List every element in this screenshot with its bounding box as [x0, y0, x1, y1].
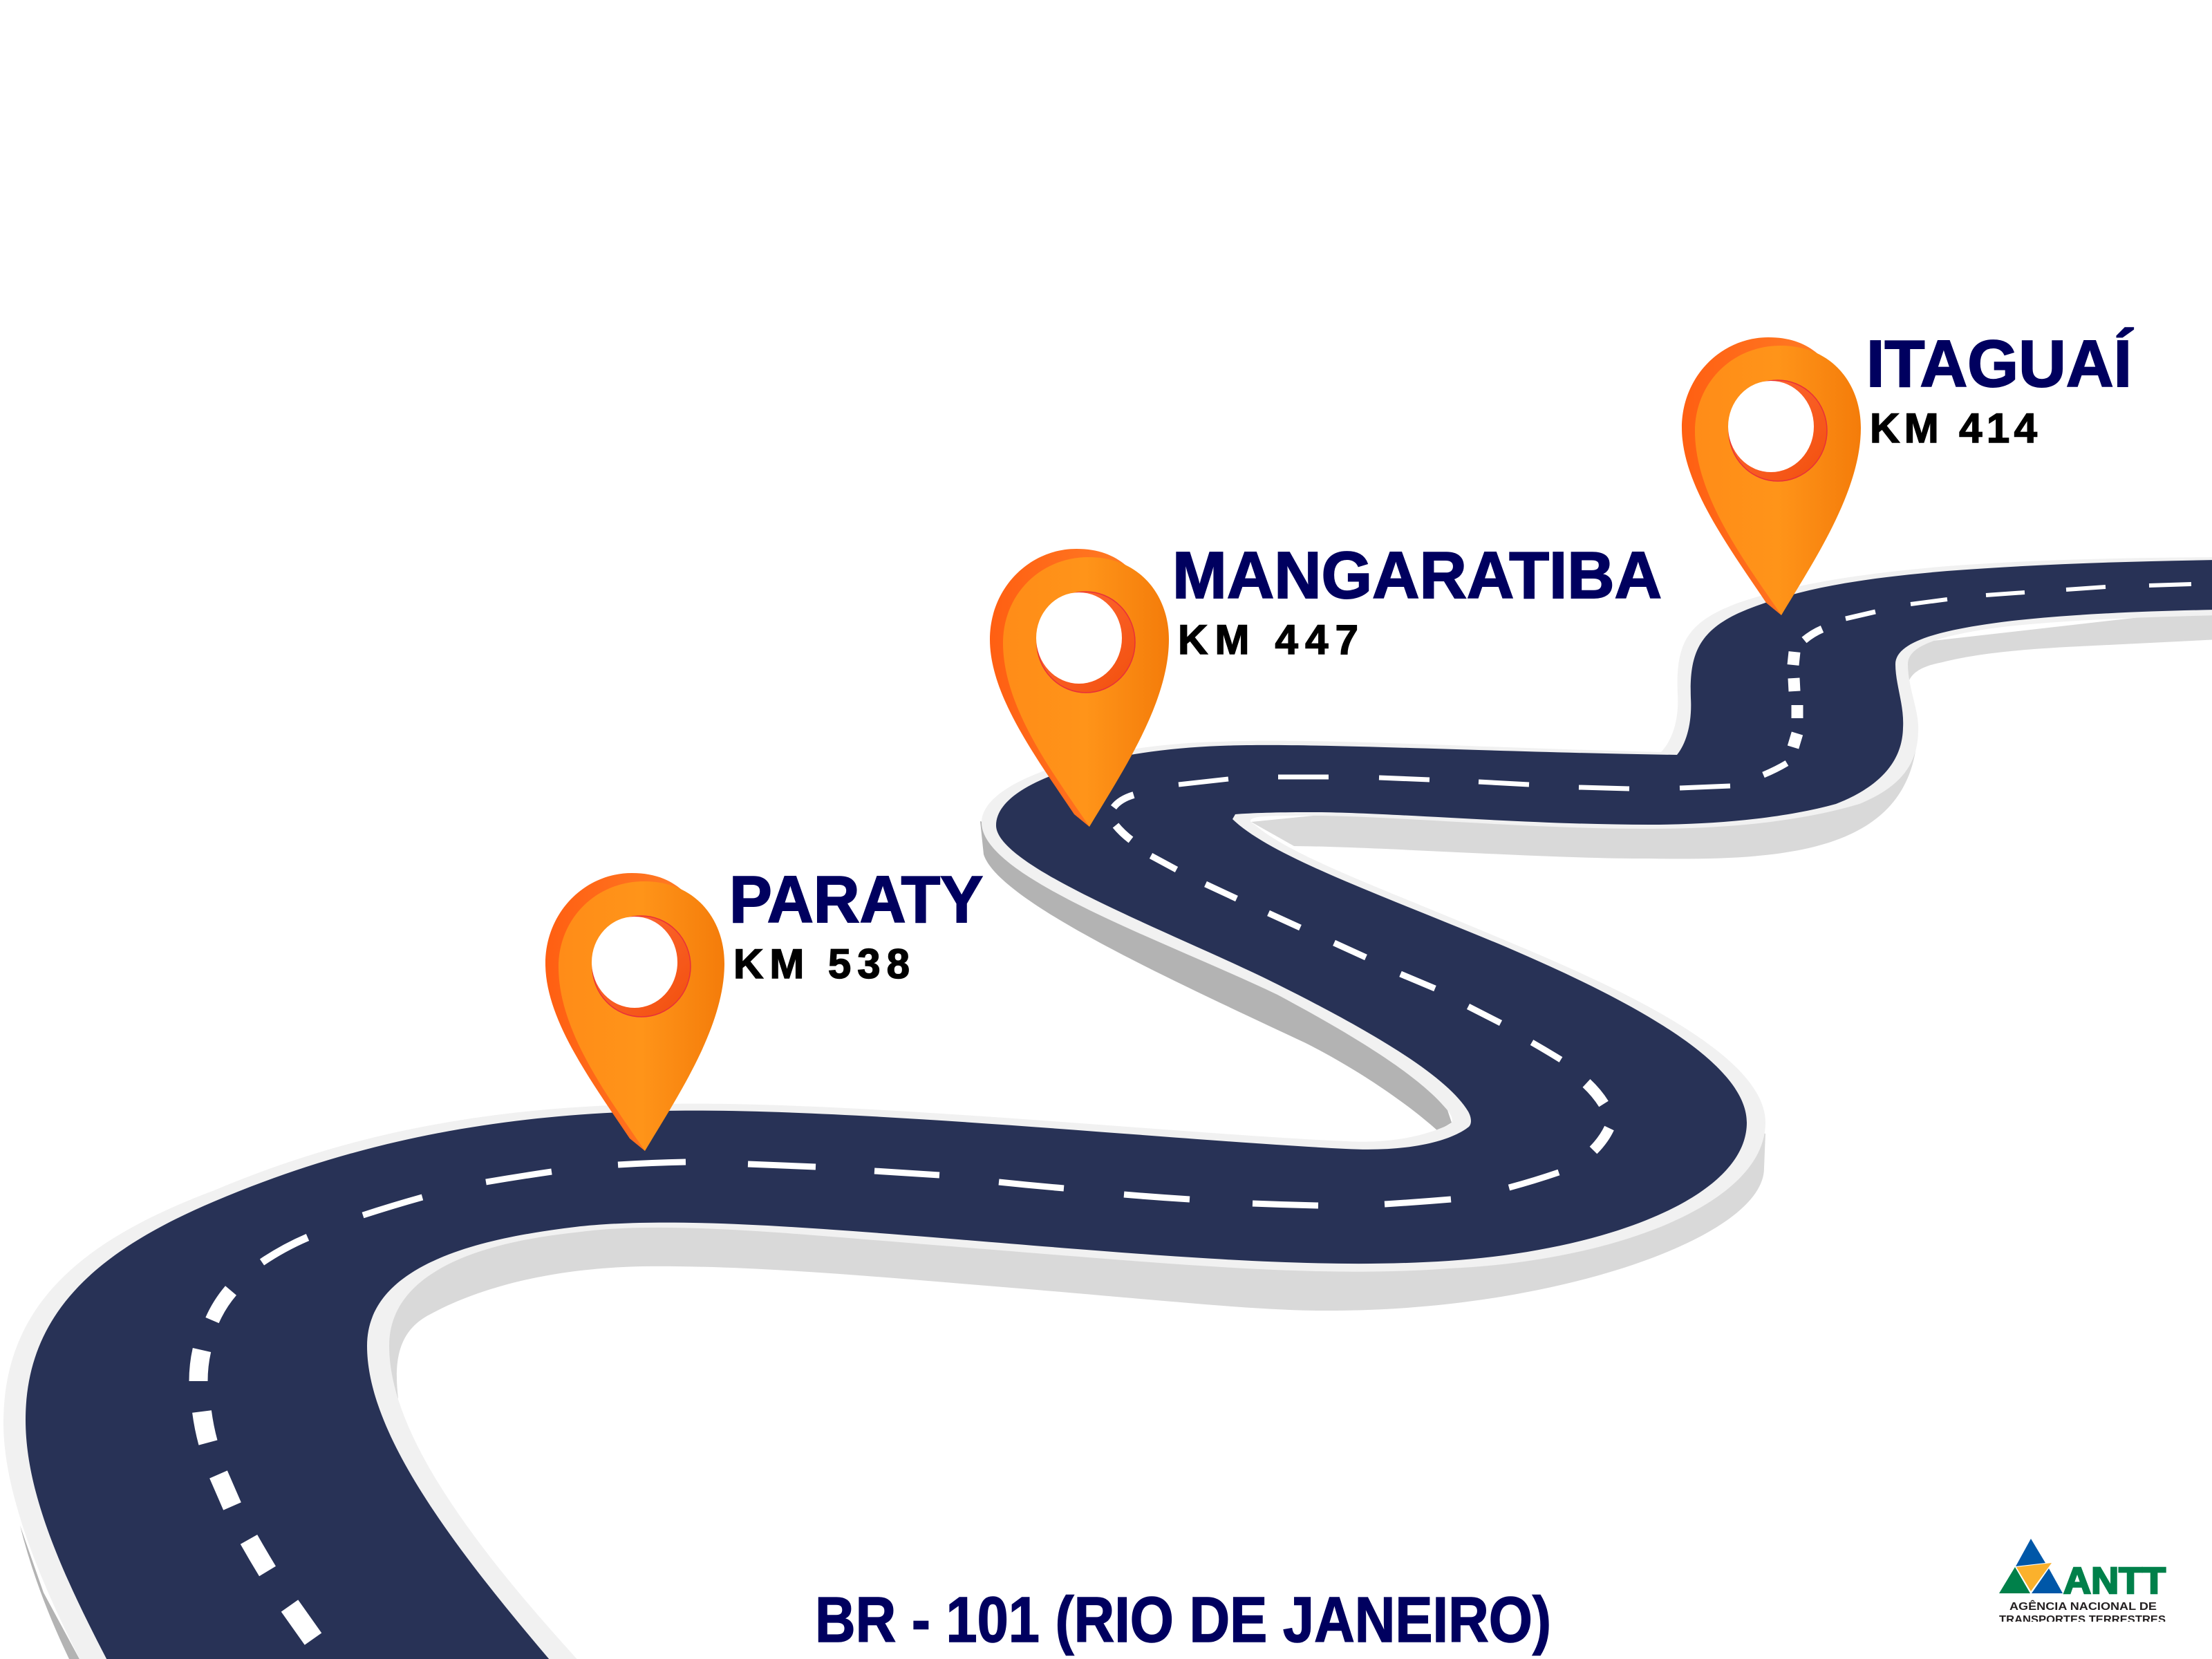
- logo agency name: AGÊNCIA NACIONAL DE: [2009, 1600, 2157, 1613]
- kilometre marker: KM 447: [1178, 617, 1358, 663]
- city name: PARATY: [729, 863, 983, 937]
- label: Paraty: [729, 863, 983, 987]
- footer title: BR - 101 (RIO DE JANEIRO): [815, 1584, 1551, 1656]
- logo triangle mark: [1999, 1539, 2063, 1593]
- road side shadow: lower band: [377, 1106, 1765, 1398]
- label: Mangaratiba: [1172, 538, 1662, 663]
- pin: Itaguaí: [1682, 337, 1861, 615]
- pin: Paraty: [545, 873, 724, 1151]
- label: Itaguaí: [1866, 327, 2133, 451]
- kilometre marker: KM 414: [1870, 405, 2038, 451]
- logo: ANTT: [1999, 1539, 2166, 1626]
- road side shadow: middle band: [1251, 733, 1918, 859]
- road: [3, 557, 2212, 1659]
- road asphalt: [26, 560, 2212, 1659]
- logo wordmark: ANTT: [2063, 1560, 2166, 1602]
- road side shadow: dark diagonal band: [980, 821, 1452, 1131]
- road side shadow: upper right band: [1901, 608, 2212, 680]
- logo agency name: TRANSPORTES TERRESTRES: [1999, 1614, 2166, 1626]
- city name: ITAGUAÍ: [1866, 327, 2133, 401]
- city name: MANGARATIBA: [1172, 538, 1662, 612]
- road shoulder: [3, 557, 2212, 1659]
- logo agency name: [1999, 1600, 2165, 1622]
- pin: Mangaratiba: [990, 549, 1169, 827]
- road side shadow: left sliver: [20, 1526, 104, 1659]
- kilometre marker: KM 538: [733, 941, 910, 987]
- road centre dashes: [198, 584, 2191, 1639]
